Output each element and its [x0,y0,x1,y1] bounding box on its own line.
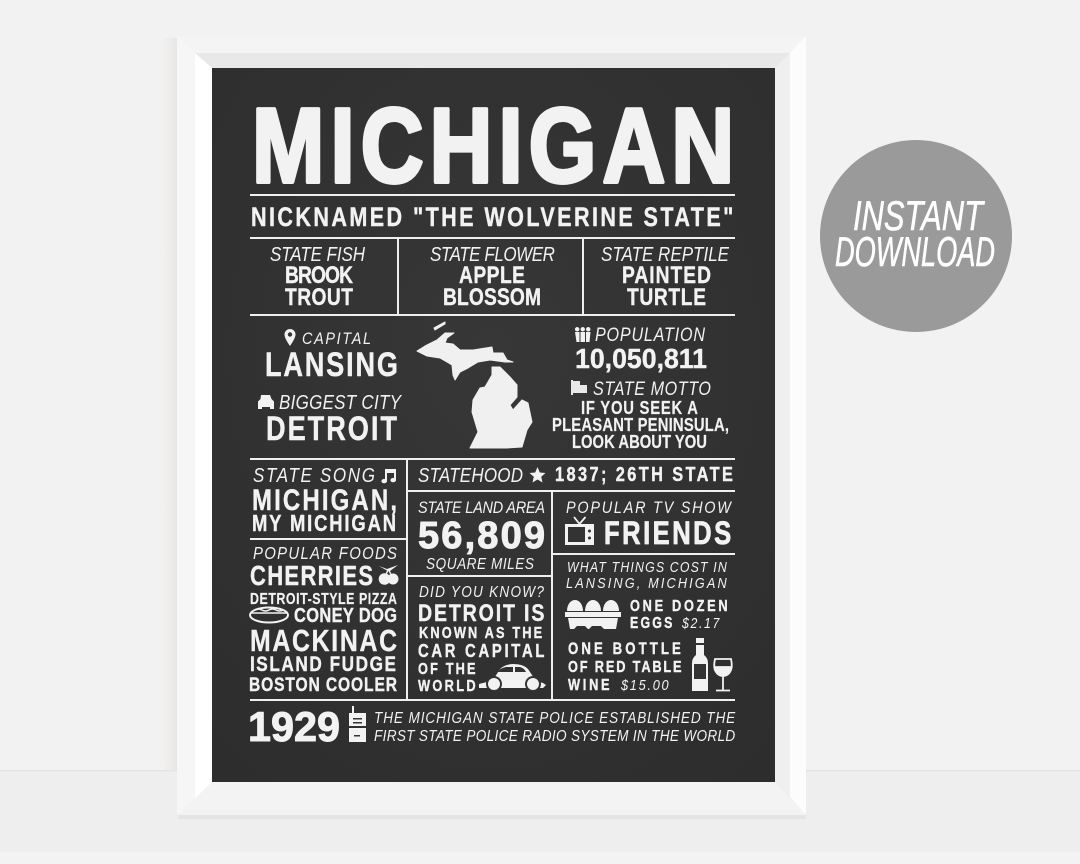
panel: population: POPULATION [595,324,705,345]
icon: cherries [379,565,398,585]
panel: did you know: KNOWN AS THE [419,625,543,642]
map of Michigan [417,322,532,448]
panel: biggest city: DETROIT [266,409,397,448]
icon: map pin [284,329,296,346]
icon: egg carton [565,600,621,629]
panel: population: 10,050,811 [575,343,707,374]
chalkboard poster [212,68,775,782]
divider lines [250,195,735,700]
title: MICHIGAN [252,86,734,205]
panel: popular foods: DETROIT-STYLE PIZZA [250,590,397,607]
panel: state song: MY MICHIGAN [252,511,396,537]
panel: popular foods: CONEY DOG [294,603,397,626]
icon: car [479,664,546,691]
icon: police radio [349,706,366,742]
panel: state flower: BLOSSOM [443,283,541,311]
icon: music note [381,469,396,483]
badge: instant download: INSTANT [853,192,985,239]
badge: instant download [820,140,1012,332]
panel: state reptile: PAINTED [622,261,711,289]
panel: state fish: STATE FISH [270,243,366,265]
panel: capital: CAPITAL [302,330,371,348]
panel: did you know: DID YOU KNOW? [419,584,545,601]
icon: hot dog [250,608,288,622]
panel: statehood: 1837; 26TH STATE [555,462,733,485]
panel: did you know [418,584,546,695]
panel: state motto: LOOK ABOUT YOU [572,431,707,452]
panel: 1929 fact: THE MICHIGAN STATE POLICE ESTABLISHED THE [374,710,736,727]
panel: what things cost: OF RED TABLE [568,659,682,676]
panel: what things cost: LANSING, MICHIGAN [566,574,728,591]
panel: 1929 fact: FIRST STATE POLICE RADIO SYSTEM IN THE WORLD [374,728,736,745]
panel: popular foods: ISLAND FUDGE [250,652,396,677]
panel: did you know: WORLD [418,678,476,695]
panel: state fish: TROUT [285,283,354,311]
panel: did you know: CAR CAPITAL [418,640,544,661]
panel: state flower: STATE FLOWER [430,243,555,265]
panel: state reptile [601,243,730,311]
panel: did you know: OF THE [418,661,476,678]
panel: popular foods: MACKINAC [250,623,397,658]
panel: land area: 56,809 [418,515,545,557]
panel: what things cost: $15.00 [620,676,669,693]
panel: state motto: IF YOU SEEK A [581,397,698,418]
panel: state motto: PLEASANT PENINSULA, [552,414,729,435]
panel: what things cost: WINE [568,677,610,694]
panel: what things cost: EGGS [630,614,672,631]
nickname: NICKNAMED "THE WOLVERINE STATE" [251,203,733,233]
panel: state reptile: STATE REPTILE [601,243,730,265]
panel: 1929 fact [248,703,736,750]
panel: land area [418,499,545,573]
icon: people [575,327,590,342]
panel: popular foods: BOSTON COOLER [249,673,397,695]
picture frame [177,36,806,815]
panel: biggest city [258,391,402,448]
panel: popular tv show [566,499,733,552]
panel: land area: SQUARE MILES [426,556,534,573]
panel: popular tv show: POPULAR TV SHOW [566,499,733,517]
badge: instant download: DOWNLOAD [835,228,995,275]
panel: state motto [552,378,729,452]
panel: capital: LANSING [265,345,398,384]
panel: did you know: DETROIT IS [418,599,544,627]
panel: 1929 fact: 1929 [248,703,340,750]
panel: what things cost [565,559,732,694]
panel: state flower: APPLE [459,261,525,289]
panel: statehood [418,462,733,486]
panel: population [575,324,707,374]
panel: state song: STATE SONG [253,464,375,486]
icon: television [566,517,594,545]
panel: popular foods [249,544,398,695]
icon: taxi [258,395,274,409]
panel: state flower [430,243,555,311]
panel: what things cost: ONE BOTTLE [568,640,681,658]
icon: star [530,467,546,482]
icon: wine bottle [692,638,708,691]
panel: state song [252,464,397,537]
icon: wine glass [714,659,732,690]
panel: statehood: STATEHOOD [418,464,523,486]
panel: land area: STATE LAND AREA [418,499,545,517]
panel: state reptile: TURTLE [627,283,706,311]
panel: popular foods: CHERRIES [250,561,373,592]
panel: state motto: STATE MOTTO [593,378,711,399]
icon: flag [571,380,587,395]
panel: state song: MICHIGAN, [252,482,397,517]
panel: what things cost: $2.17 [681,615,720,631]
panel: what things cost: WHAT THINGS COST IN [567,559,727,575]
panel: popular foods: POPULAR FOODS [253,544,397,563]
panel: popular tv show: FRIENDS [604,516,731,552]
panel: what things cost: ONE DOZEN [630,598,728,615]
panel: state fish [270,243,366,311]
panel: biggest city: BIGGEST CITY [279,391,402,413]
panel: state fish: BROOK [285,261,353,289]
